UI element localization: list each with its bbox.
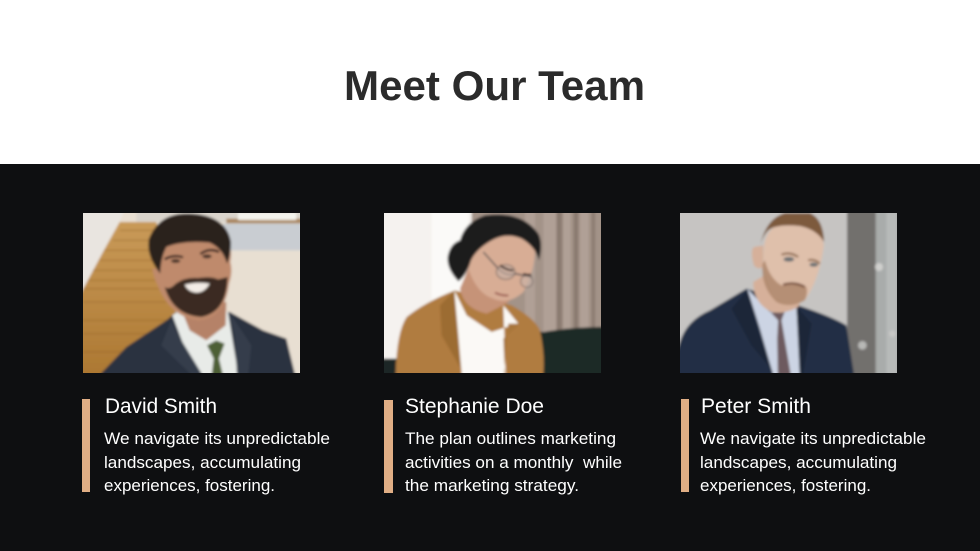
name and bio: landscapes, accumulating — [104, 453, 301, 472]
name and bio: We navigate its unpredictable — [700, 429, 926, 448]
name and bio: experiences, fostering. — [700, 476, 871, 495]
photo: David Smith — [83, 213, 300, 373]
photo: Peter Smith — [680, 213, 897, 373]
name and bio: David Smith — [105, 395, 217, 418]
dark team panel — [0, 164, 980, 551]
name and bio — [700, 395, 926, 495]
name and bio: experiences, fostering. — [104, 476, 275, 495]
team member: David Smith — [82, 395, 330, 495]
name and bio: We navigate its unpredictable — [104, 429, 330, 448]
name and bio: Peter Smith — [701, 395, 811, 418]
team member: Peter Smith — [681, 395, 926, 495]
accent bar — [82, 399, 90, 492]
name and bio: The plan outlines marketing — [405, 429, 616, 448]
accent bar — [681, 399, 689, 492]
team member: Stephanie Doe — [384, 395, 622, 495]
title: Meet Our Team — [344, 62, 645, 109]
name and bio: the marketing strategy. — [405, 476, 579, 495]
name and bio: activities on a monthly while — [405, 453, 622, 472]
name and bio — [405, 395, 622, 495]
name and bio: landscapes, accumulating — [700, 453, 897, 472]
photo: Stephanie Doe — [384, 213, 601, 373]
accent bar — [384, 400, 393, 493]
name and bio: Stephanie Doe — [405, 395, 544, 418]
name and bio — [104, 395, 330, 495]
